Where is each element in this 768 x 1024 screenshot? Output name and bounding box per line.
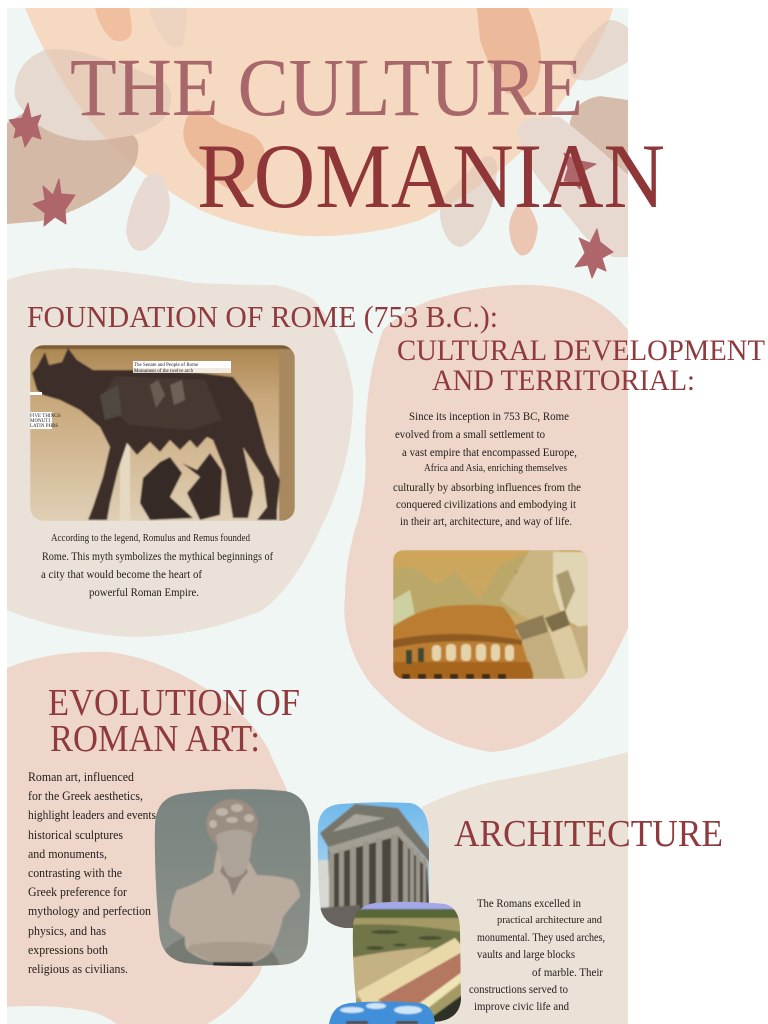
text: foundation description: Rome. This myth symbolizes the mythical beginnings of [42,549,273,563]
text: evolution description: physics, and has [28,924,106,938]
text: architecture description: practical architecture and [497,914,602,926]
decorative header blobs [7,8,628,257]
text: evolution description: contrasting with the [28,866,122,880]
text: evolution description: historical sculptures [28,828,123,842]
label: inset caption: LATIN PHRS [30,424,58,429]
text: foundation description [41,532,273,599]
icon: star left bottom [33,179,75,226]
text: cultural description: conquered civilizations and embodying it [396,497,577,511]
text: foundation description: According to the legend, Romulus and Remus founded [51,532,250,544]
title: ROMANIAN [197,126,665,228]
icon: star left top [9,103,41,147]
text: foundation description: a city that would become the heart of [41,567,202,581]
text: evolution description: religious as civilians. [28,962,128,976]
text: evolution description: Greek preference for [28,885,128,899]
text: evolution description: for the Greek aesthetics, [28,789,143,803]
label: inset caption: MONUTI [30,419,50,424]
text: evolution description: expressions both [28,943,109,957]
text: cultural description: in their art, architecture, and way of life. [400,514,572,528]
icon: star right bottom [575,229,613,278]
text: evolution description: and monuments, [28,847,107,861]
text: foundation description: powerful Roman Empire. [89,585,199,599]
panel: evolution of Roman art [7,652,315,1024]
text: cultural description: Since its inception in 753 BC, Rome [409,409,569,423]
text: cultural description: a vast empire that encompassed Europe, [402,445,577,459]
image: Roman temple [316,800,432,930]
heading: architecture: ARCHITECTURE [454,812,723,854]
heading: foundation: FOUNDATION OF ROME (753 B.C.): [27,299,498,334]
text: evolution description [28,770,156,976]
image: colosseum collage [393,550,588,679]
text: cultural description [393,409,581,528]
label: inset caption: FIVE THINGS [30,414,61,419]
text: architecture description: The Romans excelled in [477,896,581,910]
text: cultural description: Africa and Asia, enriching themselves [424,462,567,474]
text: evolution description: Roman art, influenced [28,770,135,784]
text: architecture description: monumental. They used arches, [477,932,605,944]
title: THE CULTURE [70,42,583,134]
text: architecture description: of marble. Their [532,967,603,979]
text: evolution description: highlight leaders and events [28,808,156,822]
image: third monument, sky [328,1000,436,1024]
heading: evolution [48,682,300,759]
text: cultural description: evolved from a small settlement to [395,427,545,441]
label: inset caption: Monument of the twelve arch [134,369,194,374]
panel: architecture [316,752,723,1024]
text: cultural description: culturally by absorbing influences from the [393,480,581,494]
panel: foundation of Rome [7,268,498,637]
title [70,42,665,228]
image: marble bust [150,785,315,970]
label: inset caption [30,361,231,429]
panel: cultural development [344,285,765,752]
heading: cultural development: AND TERRITORIAL: [432,365,695,397]
image: she-wolf statue [30,345,295,521]
text: architecture description: improve civic life and [474,1001,569,1013]
label: inset caption: The Senate and People of Rome [134,363,199,368]
heading: cultural development [397,335,765,397]
text: architecture description: vaults and large blocks [477,949,575,961]
heading: cultural development: CULTURAL DEVELOPMENT [397,335,765,367]
text: evolution description: mythology and perfection [28,904,152,918]
heading: evolution: EVOLUTION OF [48,682,300,723]
heading: evolution: ROMAN ART: [50,718,260,759]
text: architecture description [469,896,605,1013]
image: aerial view of Roman ruins [350,900,462,1024]
icon: star right faint [564,153,596,189]
text: architecture description: constructions served to [469,984,568,996]
